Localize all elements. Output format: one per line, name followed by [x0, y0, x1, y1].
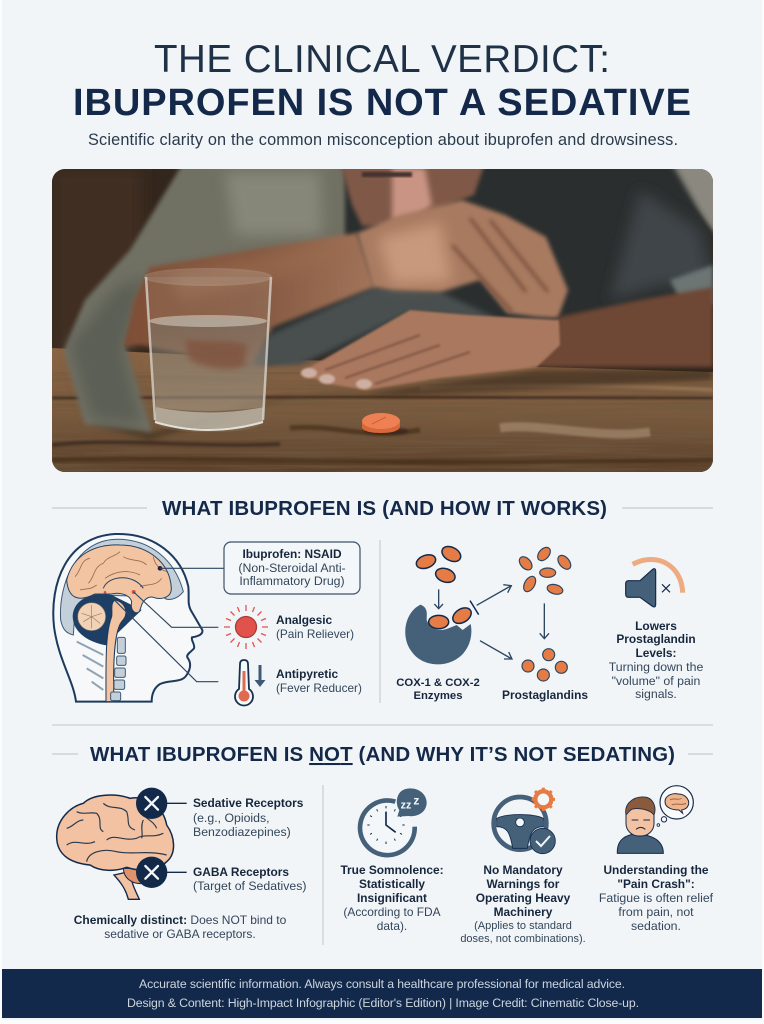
photo: man resting beside glass of water and pill — [52, 160, 720, 472]
text: sedative receptors: Benzodiazepines) — [193, 825, 291, 839]
check badge — [530, 828, 555, 854]
text: no mandatory warnings: No Mandatory — [483, 863, 563, 877]
text: sedative receptors — [193, 796, 304, 839]
lower molecules — [522, 649, 567, 681]
section heading: what ibuprofen is: WHAT IBUPROFEN IS (AND HOW IT WORKS) — [162, 497, 607, 520]
brain folds — [75, 552, 167, 590]
text: pain crash: Understanding the — [603, 863, 709, 877]
divider — [379, 540, 381, 703]
subtitle: Scientific clarity on the common misconception about ibuprofen and drowsiness. — [88, 131, 678, 149]
text: lowers prostaglandin levels: Levels: — [636, 646, 676, 660]
torso — [617, 833, 663, 853]
COX enzyme — [405, 605, 471, 664]
divider — [322, 785, 324, 945]
analgesic pointer — [134, 592, 218, 627]
icon: thermometer — [235, 660, 266, 705]
text: true somnolence: data). — [377, 919, 407, 933]
text: true somnolence: Insignificant — [357, 891, 427, 905]
thought bubble — [660, 786, 693, 819]
folds — [67, 803, 167, 862]
text: true somnolence — [340, 863, 444, 933]
dark shirt centre and right — [250, 160, 713, 365]
divider — [52, 724, 713, 726]
face — [626, 803, 654, 836]
text: analgesic: (Pain Reliever) — [276, 627, 354, 641]
text: COX enzymes — [396, 677, 480, 702]
text: analgesic: Analgesic — [276, 613, 333, 627]
text: analgesic — [276, 613, 354, 641]
icon: clock with zzz: z — [413, 794, 419, 808]
icon: clock with zzz: zz — [401, 800, 411, 812]
text: lowers prostaglandin levels: Turning down the — [609, 660, 703, 674]
illustration: head cross-section with brain — [53, 534, 224, 702]
text: GABA receptors: (Target of Sedatives) — [193, 879, 306, 893]
antipyretic pointer — [112, 597, 218, 682]
gear — [535, 791, 551, 807]
label box: ibuprofen NSAID: (Non-Steroidal Anti- — [238, 561, 346, 575]
head silhouette — [53, 534, 202, 702]
text: true somnolence: Statistically — [359, 877, 425, 891]
brain stem — [114, 872, 139, 899]
text: true somnolence: (According to FDA — [343, 905, 441, 919]
label box: ibuprofen NSAID — [224, 542, 360, 594]
upper arm — [124, 233, 374, 365]
icon: lowered volume speaker — [626, 560, 683, 607]
face — [340, 169, 486, 228]
text: antipyretic: (Fever Reducer) — [276, 681, 362, 695]
text: chemically distinct: Chemically distinct: Does NOT bind to — [74, 913, 287, 927]
text: sedative receptors: Sedative Receptors — [193, 796, 304, 810]
footer: Accurate scientific information. Always consult a healthcare professional for medical advice. — [139, 977, 625, 991]
arrow to prostaglandins — [480, 641, 512, 659]
text: pain crash: from pain, not — [618, 905, 694, 919]
text: lowers prostaglandin levels — [609, 619, 703, 701]
text: no mandatory warnings: doses, not combinations). — [460, 933, 586, 945]
section heading: what ibuprofen is not: WHAT IBUPROFEN IS NOT (AND WHY IT’S NOT SEDATING) — [90, 743, 675, 766]
spine — [111, 637, 126, 701]
pill on table — [362, 413, 408, 435]
icon: tired person thinking of brain — [617, 786, 693, 853]
cerebrum — [67, 545, 171, 613]
text: antipyretic: Antipyretic — [276, 667, 338, 681]
text: pain crash: Fatigue is often relief — [599, 891, 714, 905]
title: THE CLINICAL VERDICT: — [154, 38, 610, 81]
cerebrum — [57, 795, 174, 870]
text: chemically distinct — [74, 913, 287, 941]
arrow down — [540, 603, 549, 639]
blocked receptor badge 1 — [136, 788, 187, 819]
text: GABA receptors: GABA Receptors — [193, 865, 289, 879]
text: true somnolence: True Somnolence: — [340, 863, 444, 877]
text: pain crash: sedation. — [631, 919, 681, 933]
blocked receptor badge 2 — [136, 857, 187, 888]
text: lowers prostaglandin levels: signals. — [635, 687, 677, 701]
icon: steering wheel with gear and check — [494, 788, 555, 854]
text: no mandatory warnings: Machinery — [494, 905, 553, 919]
title — [73, 38, 691, 124]
title: IBUPROFEN IS NOT A SEDATIVE — [73, 82, 691, 124]
icon: pain sun — [224, 605, 268, 649]
text: pain crash — [599, 863, 714, 933]
text: COX enzymes: Enzymes — [414, 690, 462, 702]
cerebellum — [78, 603, 106, 631]
text: no mandatory warnings: Operating Heavy — [476, 891, 571, 905]
text: GABA receptors — [193, 865, 306, 893]
text: no mandatory warnings: (Applies to standard — [474, 920, 572, 932]
cerebellum — [123, 868, 148, 884]
text: lowers prostaglandin levels: Lowers — [635, 619, 677, 633]
text: pain crash: "Pain Crash": — [617, 877, 695, 891]
upper molecules — [517, 545, 573, 596]
glass of water — [145, 269, 271, 432]
footer: Design & Content: High-Impact Infographic (Editor's Edition) | Image Credit: Cinematic Close-up. — [127, 996, 639, 1010]
pills above enzyme — [414, 543, 463, 585]
text: prostaglandins: Prostaglandins — [502, 688, 588, 702]
label box: ibuprofen NSAID: Inflammatory Drug) — [239, 574, 345, 588]
lower hand — [300, 310, 560, 390]
skull ring — [60, 539, 183, 635]
icon: clock with zzz — [360, 788, 427, 855]
hair — [626, 797, 655, 815]
text: antipyretic — [276, 667, 362, 695]
text: sedative receptors: (e.g., Opioids, — [193, 811, 270, 825]
navy membrane — [73, 594, 142, 646]
text: COX enzymes: COX-1 & COX-2 — [396, 677, 480, 689]
footer — [2, 969, 762, 1018]
text: chemically distinct: sedative or GABA receptors. — [104, 927, 256, 941]
text: lowers prostaglandin levels: Prostaglandin — [616, 632, 696, 646]
text: no mandatory warnings — [460, 863, 586, 945]
brain stem — [106, 600, 126, 702]
table shadow under arms — [90, 368, 713, 440]
text: no mandatory warnings: Warnings for — [487, 877, 560, 891]
table — [52, 348, 713, 472]
inhibited arrow — [477, 585, 511, 605]
lower arm — [537, 287, 713, 367]
diagram: COX enzymes and prostaglandins — [405, 543, 573, 681]
text: lowers prostaglandin levels: "volume" of pain — [612, 674, 701, 688]
fist — [357, 200, 568, 318]
illustration: brain with blocked receptors — [57, 788, 187, 899]
left shirt — [64, 160, 345, 433]
nsaid pointer — [158, 566, 162, 571]
label box: ibuprofen NSAID: Ibuprofen: NSAID — [242, 547, 342, 561]
